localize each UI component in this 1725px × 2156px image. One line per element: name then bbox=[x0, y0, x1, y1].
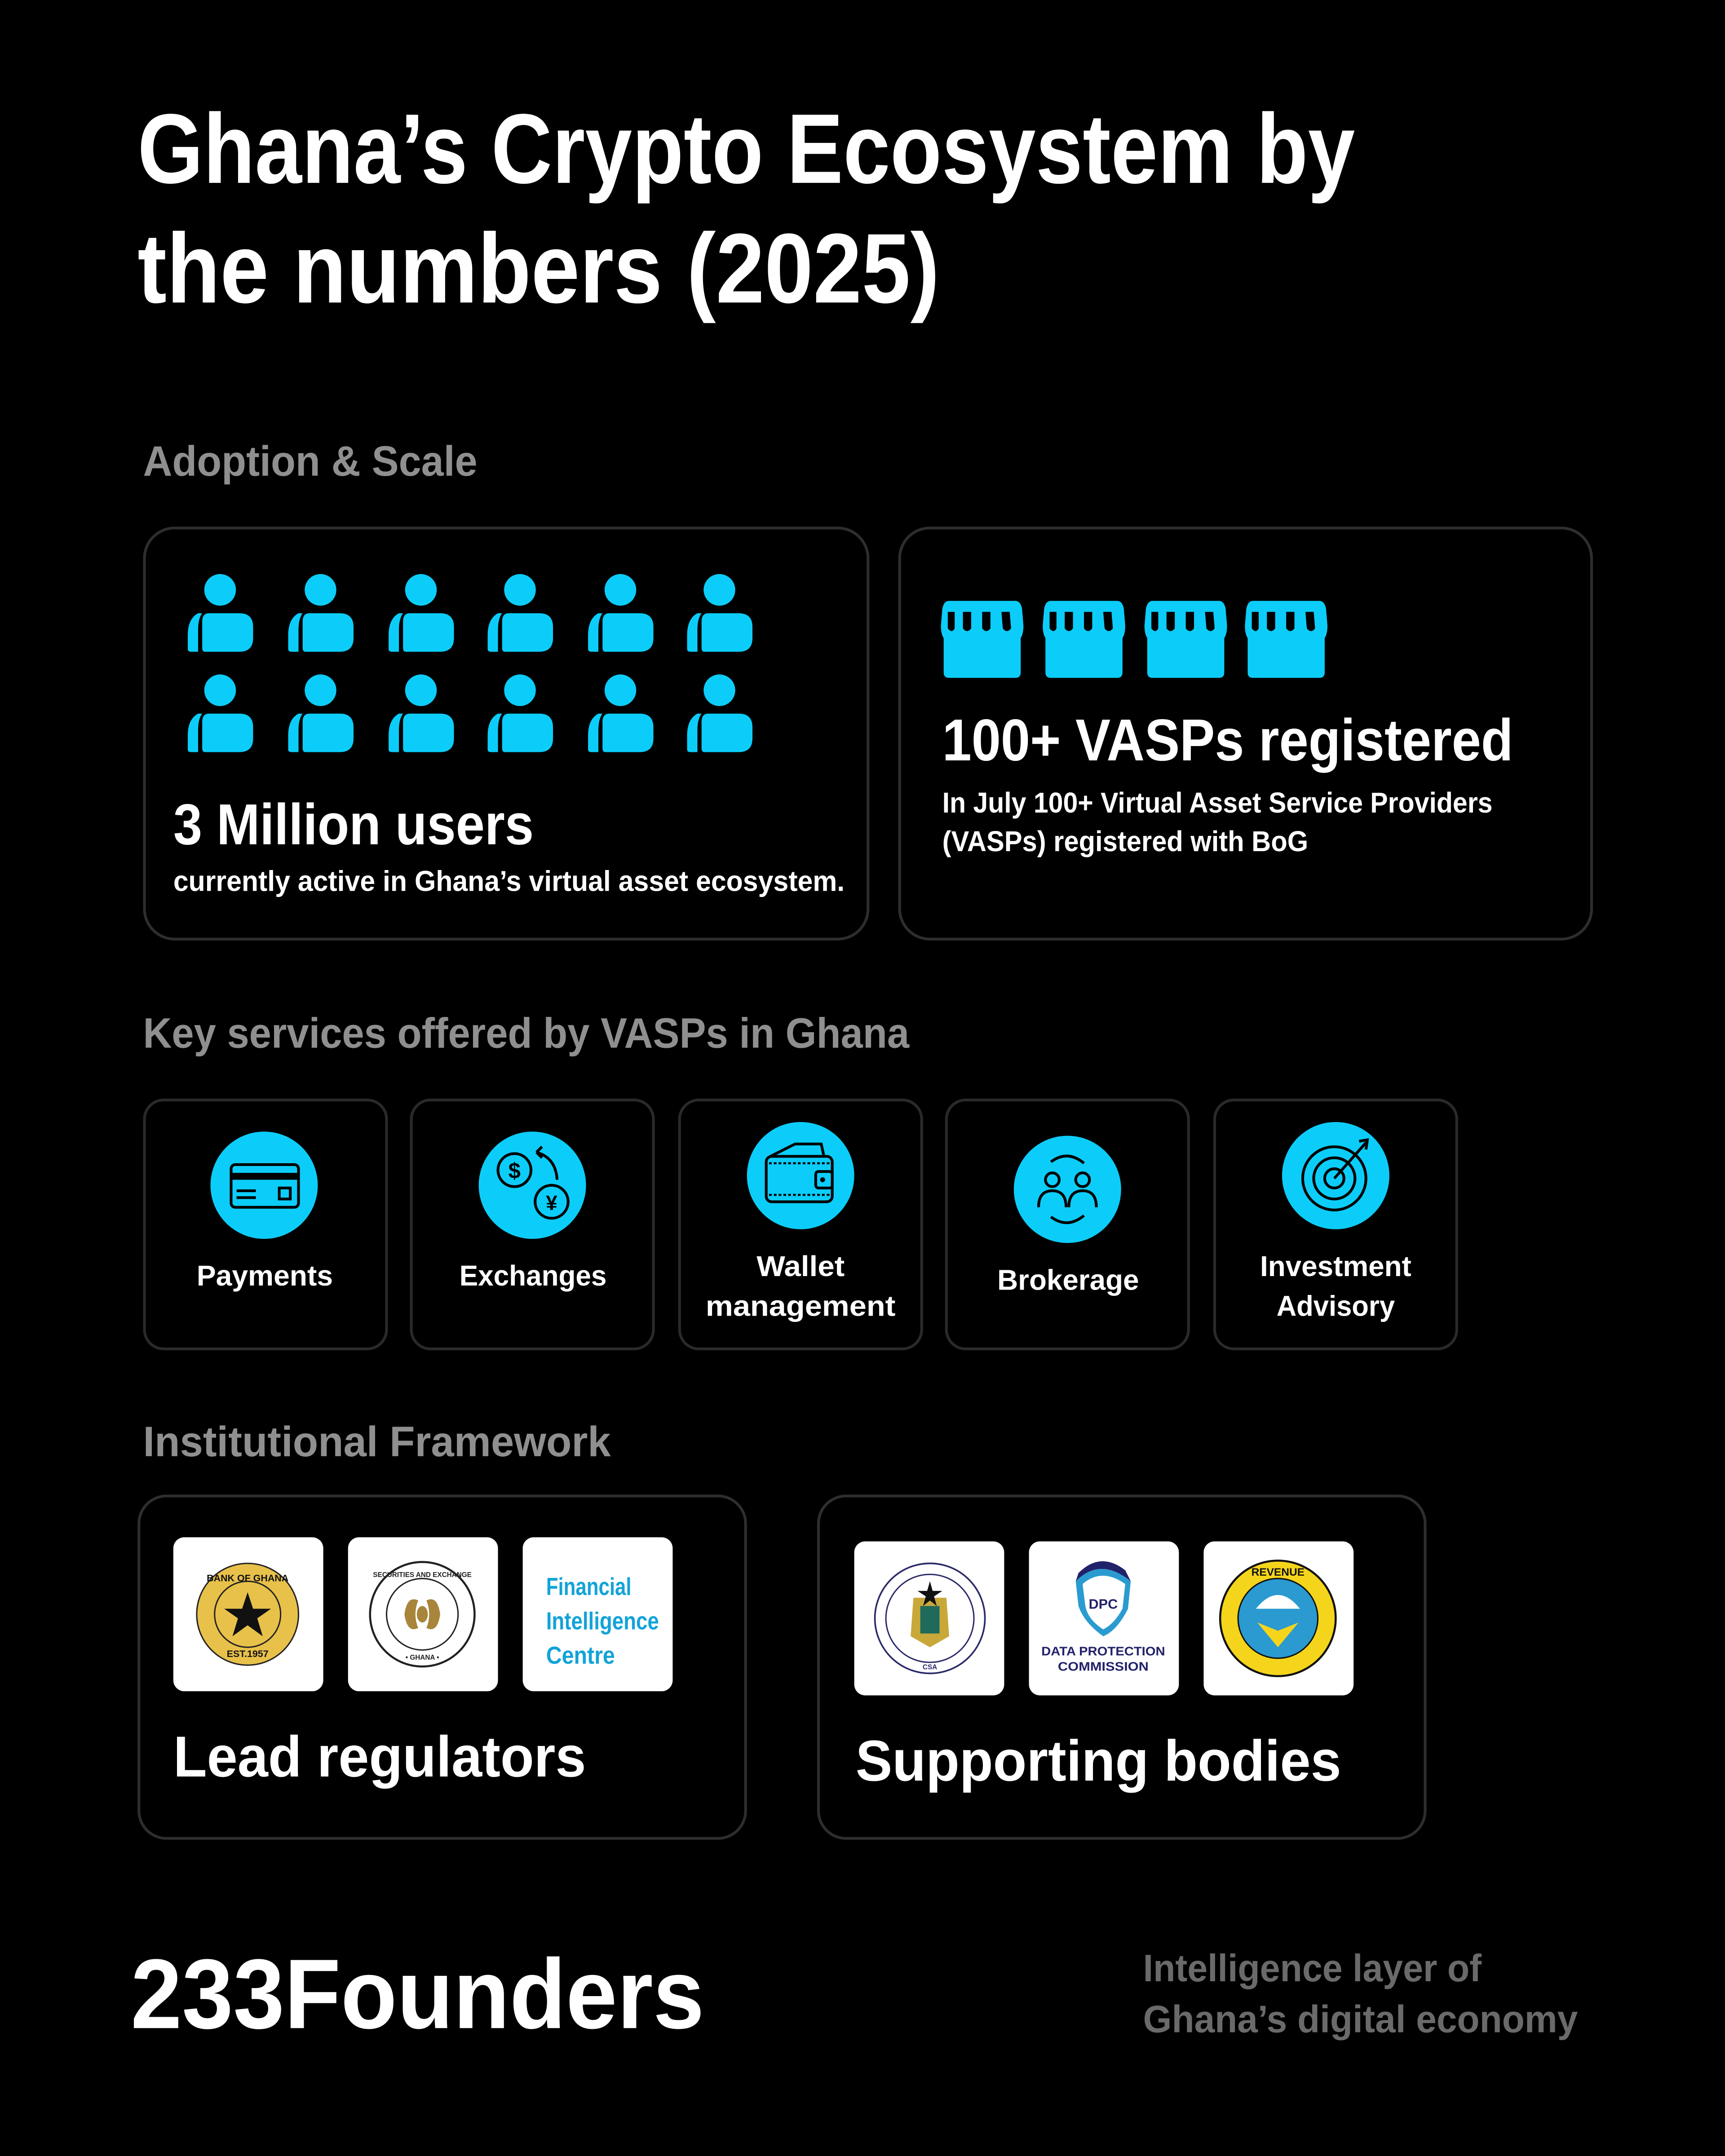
icon: currency exchange: ¥ bbox=[546, 1191, 557, 1215]
label: Supporting bodies: Supporting bodies bbox=[856, 1729, 1341, 1793]
panel: users bbox=[145, 528, 868, 939]
tagline bbox=[1143, 1947, 1578, 2041]
logo: Financial Intelligence Centre: Intelligence bbox=[546, 1607, 659, 1635]
logo: Bank of Ghana: BANK OF GHANA bbox=[207, 1573, 288, 1583]
caption: In July 100+ Virtual Asset Service Providers bbox=[942, 786, 1492, 819]
panel: VASPs bbox=[900, 528, 1592, 939]
heading: Key services: Key services offered by VASPs in Ghana bbox=[143, 1010, 910, 1057]
caption: (VASPs) registered with BoG bbox=[942, 825, 1308, 857]
logo: Ghana Revenue Authority: REVENUE bbox=[1252, 1566, 1305, 1578]
panel: supporting bodies bbox=[818, 1496, 1425, 1838]
card: Exchanges bbox=[411, 1100, 654, 1349]
icon: card bbox=[211, 1131, 318, 1239]
brand: 233Founders: 233Founders bbox=[131, 1938, 704, 2049]
card: Payments: Payments bbox=[197, 1259, 333, 1292]
logo: SEC Ghana: • GHANA • bbox=[406, 1654, 439, 1661]
card: Payments bbox=[145, 1100, 386, 1349]
icon: currency exchange bbox=[479, 1131, 586, 1239]
card: Exchanges: Exchanges bbox=[460, 1259, 606, 1292]
card: Investment Advisory: Investment bbox=[1260, 1250, 1411, 1282]
logo: Data Protection Commission bbox=[1029, 1542, 1179, 1695]
icon: wallet bbox=[747, 1122, 854, 1229]
stat: 3 Million users: 3 Million users bbox=[173, 793, 534, 857]
logo: Bank of Ghana bbox=[173, 1537, 323, 1691]
icon grid: people bbox=[188, 574, 752, 752]
icon row: stores bbox=[941, 601, 1327, 678]
title: Ghana’s Crypto Ecosystem by bbox=[137, 93, 1355, 204]
logo: SEC Ghana: SECURITIES AND EXCHANGE bbox=[373, 1571, 472, 1579]
card: Investment Advisory bbox=[1215, 1100, 1457, 1349]
card: Brokerage: Brokerage bbox=[997, 1264, 1139, 1296]
icon: brokerage people bbox=[1014, 1136, 1121, 1243]
logo: Data Protection Commission: COMMISSION bbox=[1058, 1659, 1149, 1673]
logo: Data Protection Commission: DATA PROTECTION bbox=[1041, 1644, 1165, 1658]
logo: Bank of Ghana: EST.1957 bbox=[227, 1648, 269, 1659]
icon: currency exchange: $ bbox=[509, 1159, 521, 1183]
caption: currently active in Ghana’s virtual asset ecosystem. bbox=[173, 865, 845, 897]
logo: Data Protection Commission: DPC bbox=[1089, 1597, 1118, 1612]
logo: SEC Ghana bbox=[348, 1537, 498, 1691]
label: Lead regulators: Lead regulators bbox=[173, 1725, 586, 1789]
logo: Financial Intelligence Centre: Financial bbox=[546, 1573, 632, 1600]
logo: Cyber Security Authority: CSA bbox=[923, 1663, 937, 1671]
card: Investment Advisory: Advisory bbox=[1277, 1290, 1395, 1322]
title bbox=[137, 93, 1355, 323]
card: Wallet management bbox=[680, 1100, 922, 1349]
logo: Financial Intelligence Centre bbox=[523, 1537, 672, 1691]
card: Wallet management: management bbox=[706, 1290, 895, 1322]
logo: Cyber Security Authority bbox=[854, 1542, 1004, 1695]
logo: Financial Intelligence Centre: Centre bbox=[546, 1641, 615, 1669]
heading: Adoption & Scale: Adoption & Scale bbox=[143, 437, 478, 485]
logo: Ghana Revenue Authority bbox=[1203, 1542, 1353, 1695]
card: Wallet management: Wallet bbox=[756, 1250, 845, 1282]
caption bbox=[942, 786, 1492, 857]
tagline: Ghana’s digital economy bbox=[1143, 1998, 1578, 2041]
heading: Institutional Framework: Institutional Framework bbox=[143, 1418, 611, 1466]
icon: target bbox=[1282, 1122, 1389, 1229]
card: Brokerage bbox=[947, 1100, 1189, 1349]
panel: lead regulators bbox=[139, 1496, 746, 1838]
title: the numbers (2025) bbox=[137, 213, 939, 323]
stat: 100+ VASPs registered: 100+ VASPs registered bbox=[942, 707, 1513, 773]
tagline: Intelligence layer of bbox=[1143, 1947, 1482, 1990]
